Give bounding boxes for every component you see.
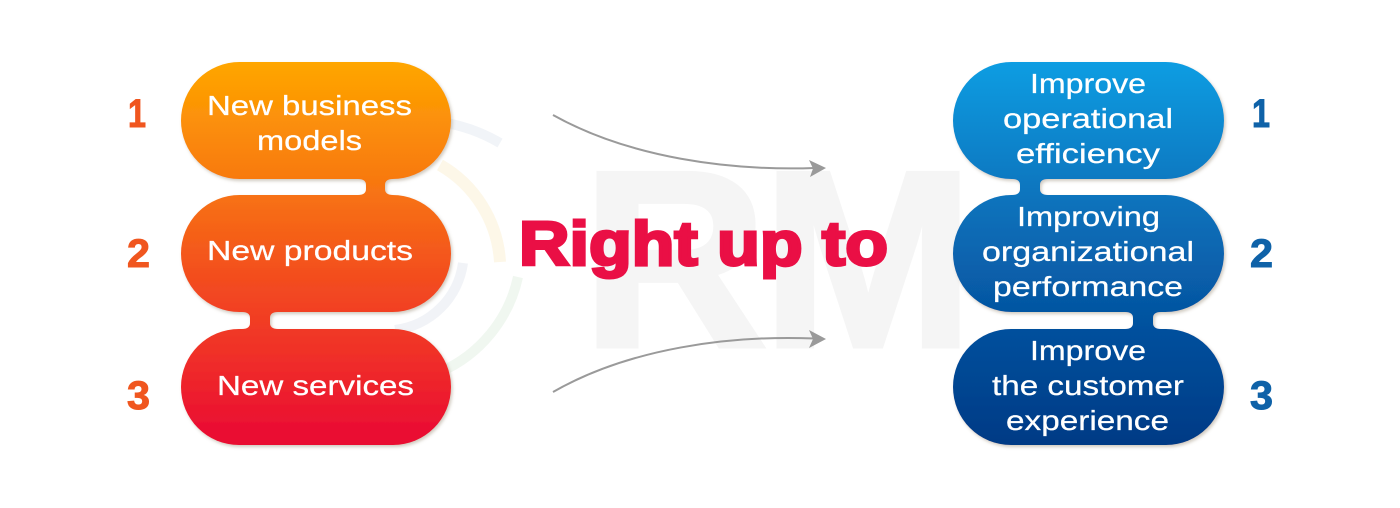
left stack: orange to red pills — [181, 62, 451, 445]
pill: new products — [181, 195, 451, 312]
arrow: top — [553, 115, 826, 177]
pill: new services — [181, 329, 451, 445]
watermark: logo rings — [395, 122, 518, 372]
label: operational: operational — [1003, 103, 1173, 134]
watermark letter M: M — [762, 120, 974, 400]
label: new products: New products — [207, 235, 413, 266]
left pill labels — [207, 90, 414, 401]
arrow: bottom — [553, 330, 826, 392]
label: the customer: the customer — [992, 370, 1184, 401]
left numbers — [127, 92, 150, 418]
watermark: RM letters — [582, 120, 974, 400]
connector: pill 1 to pill 2 — [1012, 179, 1048, 195]
label: new services: New services — [217, 370, 414, 401]
pill: operational efficiency — [953, 62, 1224, 179]
label: experience: experience — [1006, 405, 1169, 436]
label: improve: Improve — [1030, 68, 1146, 99]
pill: organizational performance — [953, 195, 1224, 312]
watermark letter R: R — [582, 120, 767, 400]
label: new business: New business — [207, 90, 412, 121]
connector: pill 2 to pill 3 — [1125, 312, 1161, 329]
pill: new business models — [181, 62, 451, 179]
label: efficiency: efficiency — [1016, 138, 1160, 169]
number 3: 3 — [127, 374, 150, 418]
right pill labels — [982, 68, 1194, 436]
label: improving: Improving — [1017, 201, 1160, 232]
pill: customer experience — [953, 329, 1224, 445]
number 3: 3 — [1250, 374, 1273, 418]
connector: pill 2 to pill 3 — [242, 312, 278, 329]
heading: right up to: Right up to — [519, 210, 888, 279]
label: improve: Improve — [1030, 335, 1146, 366]
number 2: 2 — [1250, 232, 1273, 276]
connector: pill 1 to pill 2 — [358, 179, 393, 195]
right stack: blue pills — [953, 62, 1224, 445]
label: models: models — [257, 125, 362, 156]
label: organizational: organizational — [982, 236, 1194, 267]
number 1: 1 — [1252, 92, 1270, 136]
right numbers — [1250, 92, 1273, 418]
number 2: 2 — [127, 232, 150, 276]
number 1: 1 — [128, 92, 146, 136]
label: performance: performance — [993, 271, 1183, 302]
